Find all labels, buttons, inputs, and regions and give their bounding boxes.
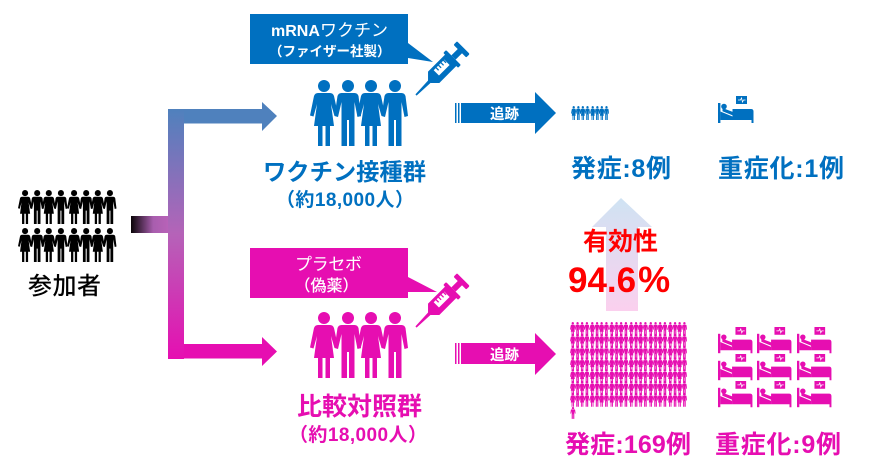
icon: syringe blue: [409, 40, 471, 102]
icon: 8 cases people: [571, 106, 609, 120]
callout: placebo: （偽薬）: [294, 277, 359, 295]
label: participants: 参加者: [28, 273, 101, 300]
text: efficacy label: 有効性: [583, 228, 658, 256]
callout: placebo: プラセボ: [295, 255, 362, 274]
text: severe 9 cases: 重症化:9例: [715, 431, 841, 459]
icon: vaccine group people: [310, 80, 408, 146]
callout: mRNA vaccine: mRNA: [271, 23, 320, 40]
participants icon: black people: [18, 190, 116, 262]
icon: syringe pink: [409, 272, 471, 334]
callout: placebo: [250, 248, 437, 298]
text: efficacy value: 94.6%: [568, 259, 670, 300]
arrow: follow up pink: 追跡: [490, 346, 520, 364]
callout: mRNA vaccine: ワクチン: [320, 21, 388, 40]
arrow: efficacy up arrow: [592, 198, 652, 311]
heading: vaccine group: ワクチン接種群: [263, 159, 426, 185]
icon: 1 severe bed: [718, 96, 754, 123]
text: severe 1 case: 重症化:1例: [718, 155, 844, 183]
callout: mRNA vaccine: （ファイザー社製）: [269, 43, 390, 59]
icon: 169 cases people: [570, 322, 687, 419]
text: onset 8 cases: 発症:8例: [571, 155, 671, 183]
icon: 9 severe beds: [718, 327, 831, 407]
arrow: follow up blue: 追跡: [490, 105, 520, 123]
arrow: follow up blue: [455, 92, 556, 134]
callout: mRNA vaccine: [250, 14, 433, 64]
text: vaccine group size: （約18,000人）: [276, 189, 414, 211]
icon: control group people: [310, 312, 408, 378]
heading: control group: 比較対照群: [297, 393, 422, 421]
text: control group size: （約18,000人）: [289, 424, 427, 446]
arrow: follow up pink: [455, 333, 556, 375]
branching arrows: [131, 102, 277, 366]
text: onset 169 cases: 発症:169例: [565, 431, 691, 459]
